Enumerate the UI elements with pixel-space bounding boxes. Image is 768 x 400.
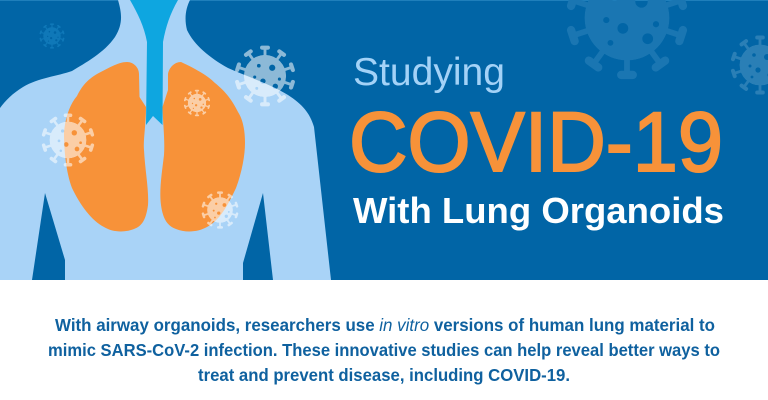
banner: blue header <box>0 0 768 280</box>
title: Studying: Studying <box>353 51 505 94</box>
icon: faint virus right edge <box>733 38 768 92</box>
illustration: right lung <box>160 62 245 231</box>
illustration: left lung <box>64 62 148 231</box>
icon: faint virus top left <box>40 24 64 48</box>
text block: description: mimic SARS-CoV-2 infection. These innovative studies can help reveal better ways to <box>48 340 720 360</box>
title: COVID-19: COVID-19 <box>349 95 723 189</box>
title: With Lung Organoids: With Lung Organoids <box>353 190 724 231</box>
text block: description: With airway organoids, researchers use in vitro versions of human lung material to <box>55 315 715 335</box>
icon: large faint virus top right <box>571 0 683 75</box>
icon: virus in right lung <box>185 91 209 115</box>
icon: virus on shoulder <box>237 48 293 104</box>
icon: virus on left lung <box>44 115 92 165</box>
icon: virus on lower right lung <box>203 193 237 227</box>
text block: description: treat and prevent disease, including COVID-19. <box>198 365 570 385</box>
text block: description <box>48 315 720 385</box>
illustration: human torso <box>0 0 331 280</box>
illustration: trachea <box>130 0 178 125</box>
